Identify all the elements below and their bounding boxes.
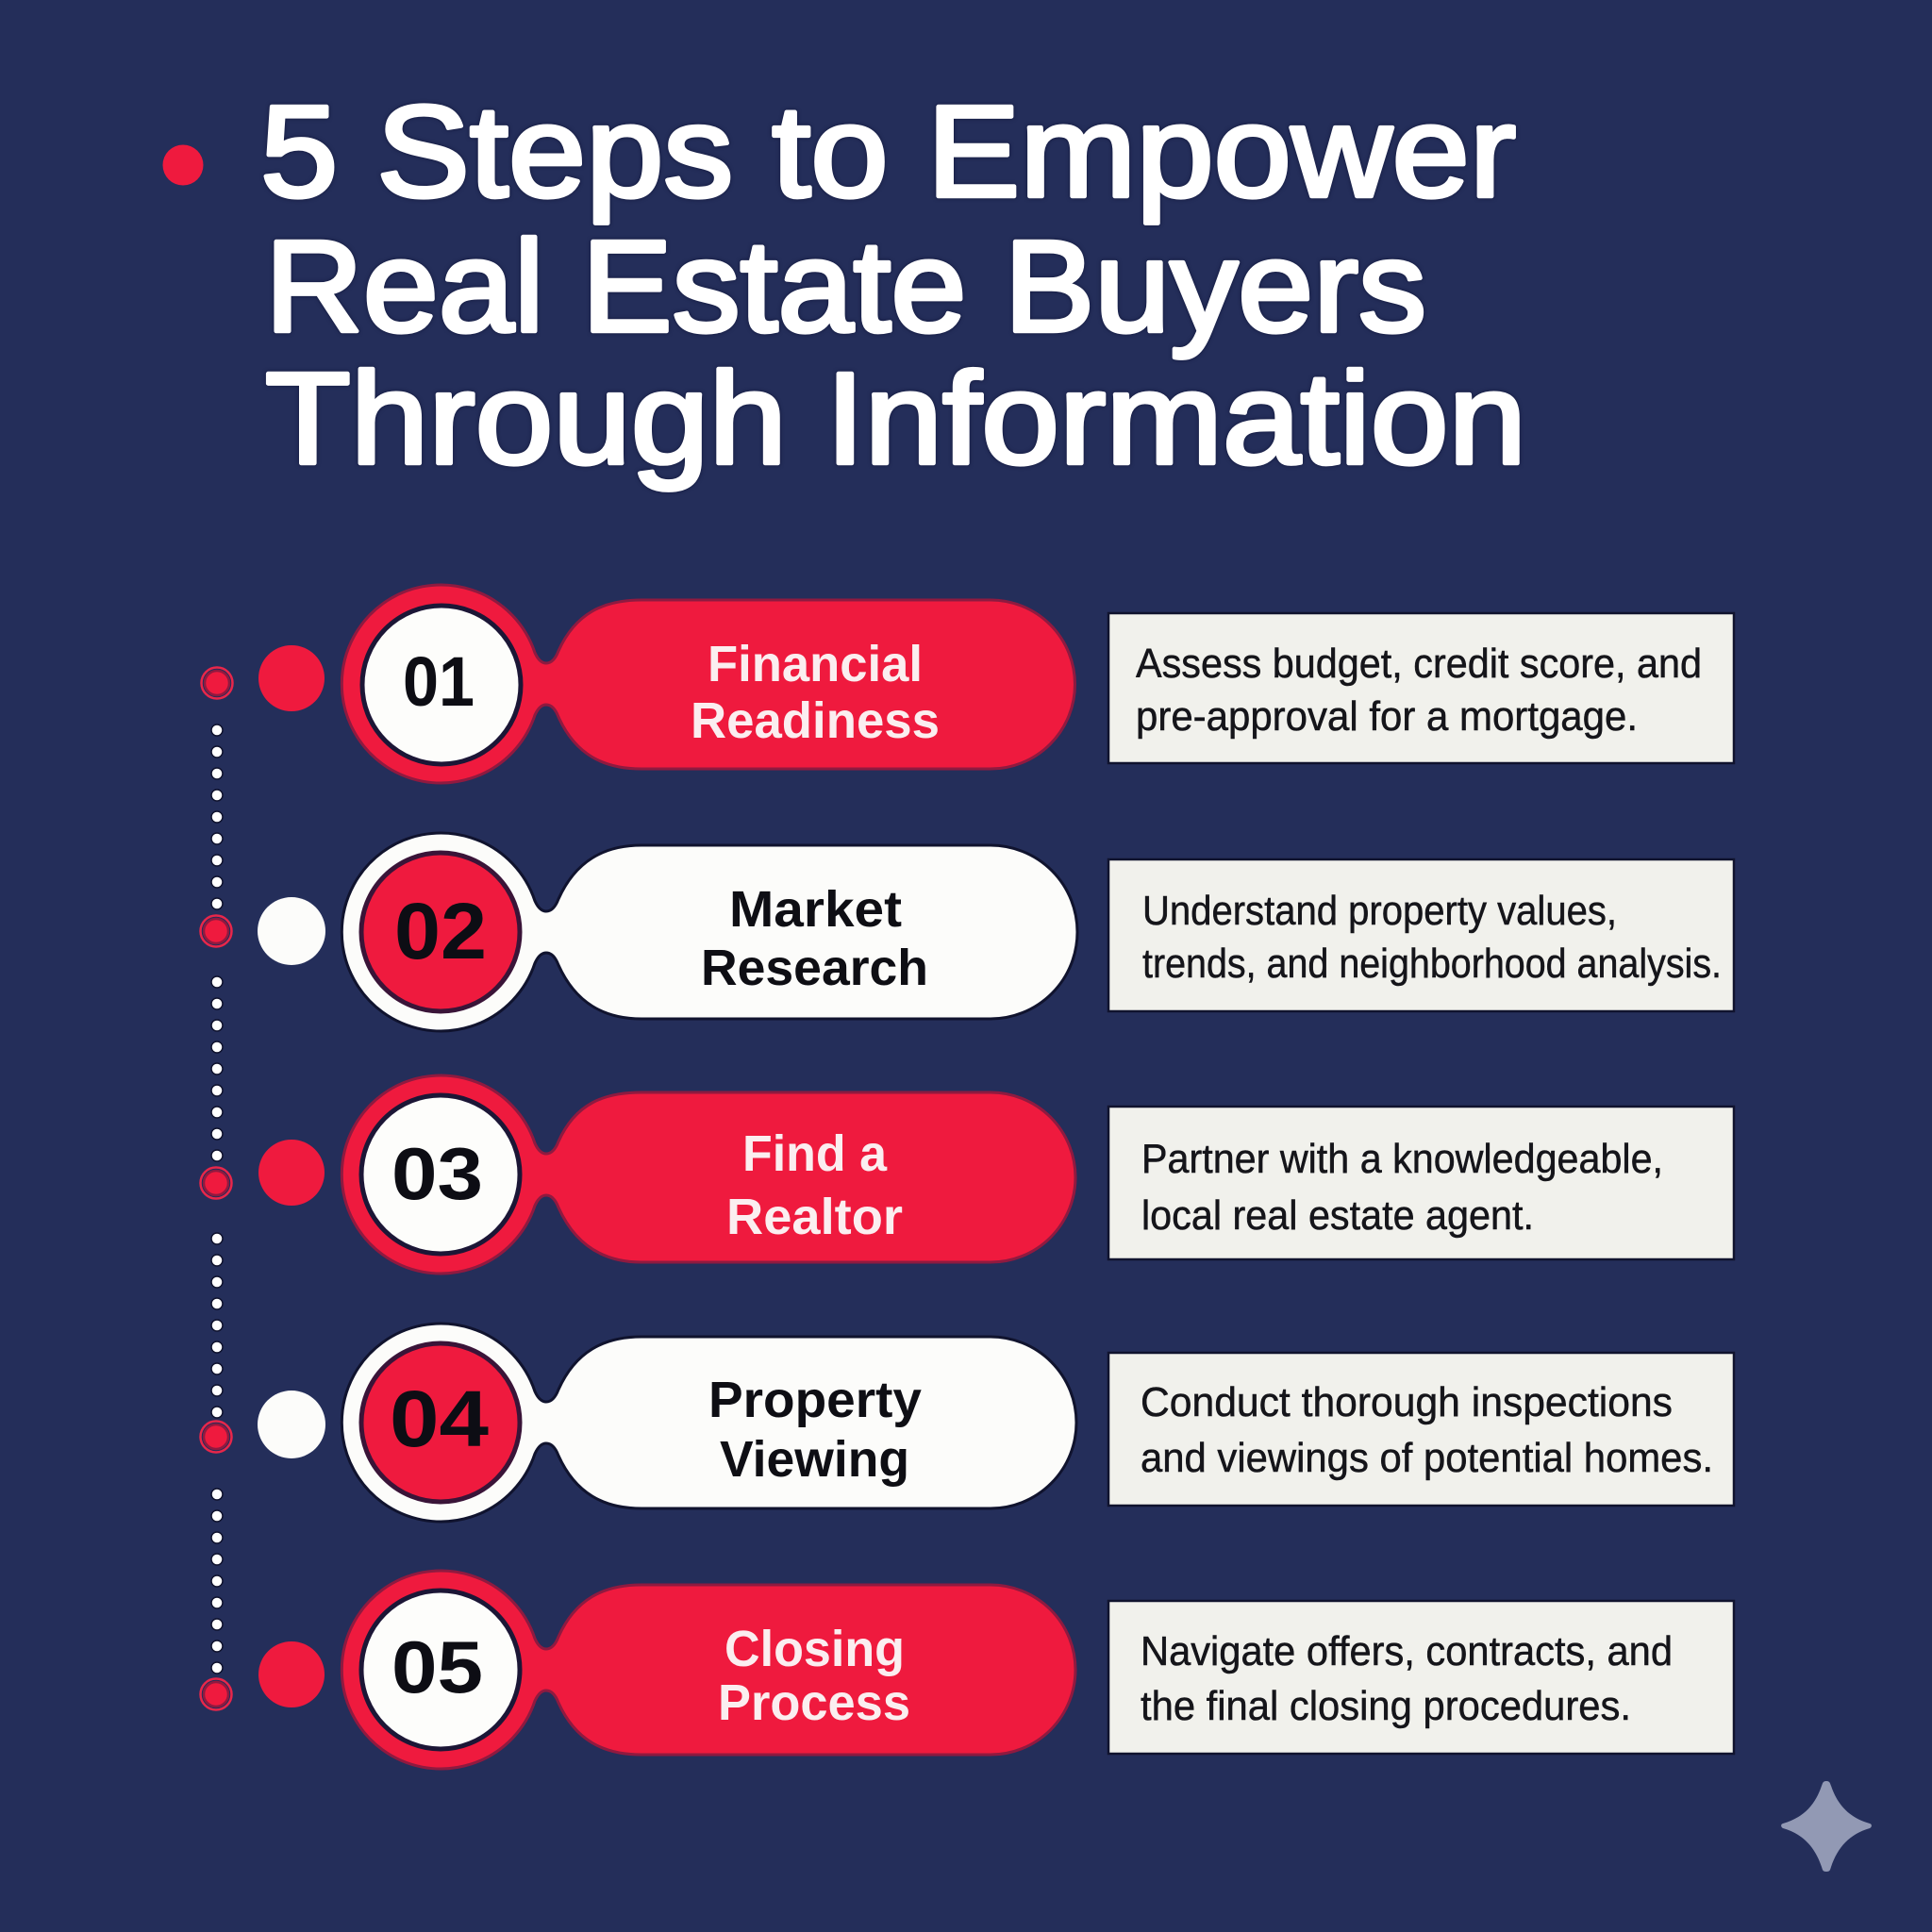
number circle 2 [361, 853, 520, 1011]
label 4: Viewing [720, 1431, 909, 1488]
title bullet dot [162, 145, 204, 185]
side dot 3 [258, 1140, 325, 1206]
timeline node 3 [200, 1168, 232, 1198]
step 4 [200, 1324, 1734, 1522]
step 2 [200, 833, 1734, 1031]
description card 3: Partner with a knowledgeable, [1141, 1136, 1663, 1182]
step 5 [200, 1571, 1734, 1769]
description card 2: trends, and neighborhood analysis. [1142, 941, 1722, 987]
label 5: Process [718, 1674, 910, 1731]
label 2: Market [729, 881, 902, 938]
label 3 [726, 1125, 903, 1245]
icon: four-point sparkle [1781, 1781, 1872, 1872]
description card 4 [1108, 1353, 1734, 1506]
description card 1: pre-approval for a mortgage. [1136, 693, 1638, 740]
timeline node 2 [200, 915, 232, 947]
label 5: Closing [724, 1621, 905, 1677]
description card 4: and viewings of potential homes. [1141, 1435, 1713, 1481]
number 04: 04 [390, 1374, 489, 1463]
number circle 3 [361, 1095, 520, 1254]
step 3 [200, 1075, 1734, 1274]
label 1 [691, 636, 940, 749]
description card 4: Conduct thorough inspections [1141, 1379, 1673, 1425]
badge and pill 2 [341, 833, 1077, 1031]
badge and pill 1 [341, 585, 1074, 783]
description card 1 [1108, 613, 1734, 763]
timeline node 1 [202, 668, 232, 698]
side dot 5 [258, 1641, 325, 1707]
label 2 [701, 881, 928, 996]
badge and pill 5 [341, 1571, 1075, 1769]
description card 5 [1108, 1601, 1734, 1754]
title: 5 Steps to Empower [260, 79, 1516, 225]
timeline node 5 [200, 1679, 232, 1709]
label 3: Realtor [726, 1189, 903, 1245]
description card 5: the final closing procedures. [1141, 1683, 1631, 1729]
side dot 4 [258, 1391, 325, 1458]
description card 2: Understand property values, [1142, 888, 1617, 934]
badge and pill 4 [341, 1324, 1076, 1522]
label 1: Financial [708, 636, 923, 692]
description card 3: local real estate agent. [1141, 1192, 1534, 1239]
description card 1: Assess budget, credit score, and [1136, 641, 1702, 687]
title: Real Estate Buyers [265, 214, 1426, 359]
description card 3 [1108, 1107, 1734, 1259]
label 4 [708, 1372, 922, 1488]
number 05: 05 [391, 1625, 483, 1708]
number circle 1 [362, 606, 521, 764]
label 1: Readiness [691, 692, 940, 749]
label 3: Find a [742, 1125, 888, 1182]
description card 5: Navigate offers, contracts, and [1141, 1628, 1673, 1674]
description card 2 [1108, 859, 1734, 1011]
side dot 2 [258, 897, 325, 965]
number 01: 01 [403, 642, 475, 721]
badge and pill 3 [341, 1075, 1075, 1274]
title: Through Information [265, 346, 1526, 491]
number 03: 03 [391, 1132, 483, 1215]
number 02: 02 [394, 887, 487, 975]
label 2: Research [701, 940, 928, 996]
title [260, 79, 1526, 491]
timeline node 4 [200, 1421, 232, 1453]
step 1 [202, 585, 1734, 783]
timeline dotted connector [211, 724, 223, 1674]
number circle 5 [361, 1591, 520, 1749]
label 4: Property [708, 1372, 922, 1428]
label 5 [718, 1621, 910, 1731]
side dot 1 [258, 645, 325, 711]
number circle 4 [361, 1343, 520, 1502]
